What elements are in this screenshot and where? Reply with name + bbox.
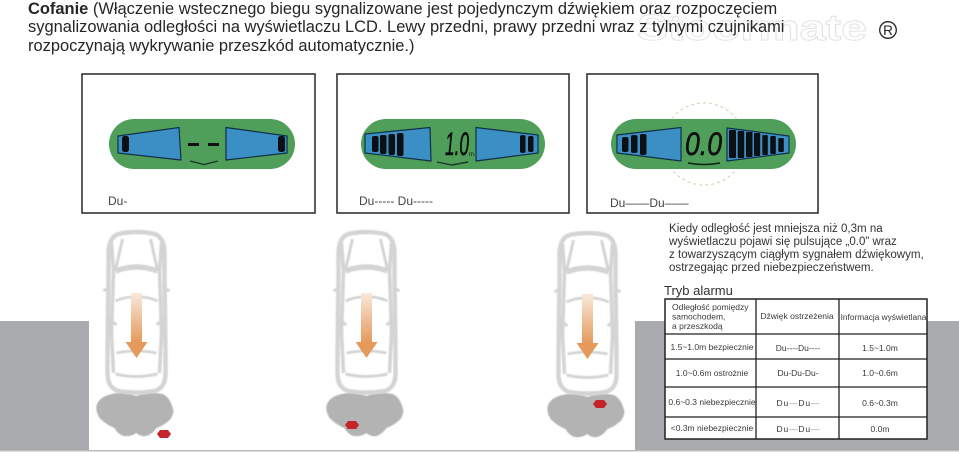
- grey band right: [635, 321, 959, 450]
- warning text: ostrzegając przed niebezpieczeństwem.: [669, 262, 874, 274]
- intro text: [28, 0, 784, 55]
- alarm table: Du----Du----: [776, 343, 820, 353]
- alarm table: 1.5~1.0m: [862, 343, 898, 353]
- car 2 with obstacle: [326, 232, 404, 436]
- panel: LCD 1: Du-: [108, 194, 127, 208]
- warning text: Kiedy odległość jest mniejsza niż 0,3m na: [669, 223, 883, 235]
- alarm table: Odległość pomiędzy: [672, 302, 749, 312]
- table heading: Tryb alarmu: [664, 283, 733, 298]
- registered mark: R: [883, 23, 893, 38]
- panel: LCD 3: [587, 74, 818, 213]
- alarm table: <0.3m niebezpiecznie: [671, 423, 753, 433]
- panel: LCD 2: [337, 74, 569, 213]
- panel: LCD 3: 0.0: [685, 126, 722, 162]
- panel: LCD 2: 1.0: [445, 126, 469, 162]
- alarm table: Du-Du-Du-: [777, 368, 819, 378]
- intro text: rozpoczynają wykrywanie przeszkód automatycznie.): [28, 37, 414, 55]
- alarm table: 0.6~0.3m: [862, 398, 898, 408]
- intro text: Cofanie (Włączenie wstecznego biegu sygnalizowane jest pojedynczym dźwiękiem oraz rozpoczęciem: [28, 0, 777, 18]
- alarm table: Du—Du—: [776, 398, 820, 408]
- grey band left: [0, 321, 89, 450]
- intro text: sygnalizowania odległości na wyświetlaczu LCD. Lewy przedni, prawy przedni wraz z tylnymi czujnikami: [28, 18, 784, 36]
- watermark: Stoormate: [637, 7, 867, 48]
- alarm table: [665, 299, 927, 439]
- warning text: z towarzyszącym ciągłym sygnałem dźwiękowym,: [669, 249, 924, 261]
- car 1 with obstacle: [96, 232, 174, 438]
- alarm table: Dźwięk ostrzeżenia: [760, 311, 834, 321]
- panel: LCD 2: m: [469, 152, 474, 158]
- alarm table: 0.6~0.3 niebezpiecznie: [668, 397, 756, 407]
- warning text: wyświetlaczu pojawi się pulsujące „0.0” wraz: [668, 236, 897, 248]
- alarm table: samochodem,: [672, 312, 725, 322]
- alarm table: Informacja wyświetlana: [841, 312, 927, 322]
- alarm table: Du—Du—: [776, 424, 820, 434]
- panel: LCD 3: Du——Du——: [610, 196, 689, 210]
- warning text: [668, 223, 924, 274]
- alarm table: 1.5~1.0m bezpiecznie: [671, 342, 754, 352]
- alarm table: a przeszkodą: [672, 321, 723, 331]
- bottom line: [0, 450, 959, 452]
- alarm table: 0.0m: [871, 424, 889, 434]
- alarm table: 1.0~0.6m: [862, 368, 898, 378]
- car 3 with obstacle: [547, 233, 624, 437]
- panel: LCD 1: [82, 74, 315, 213]
- registered mark: [880, 22, 896, 38]
- alarm table: 1.0~0.6m ostrożnie: [676, 368, 749, 378]
- panel: LCD 2: Du----- Du-----: [359, 194, 433, 208]
